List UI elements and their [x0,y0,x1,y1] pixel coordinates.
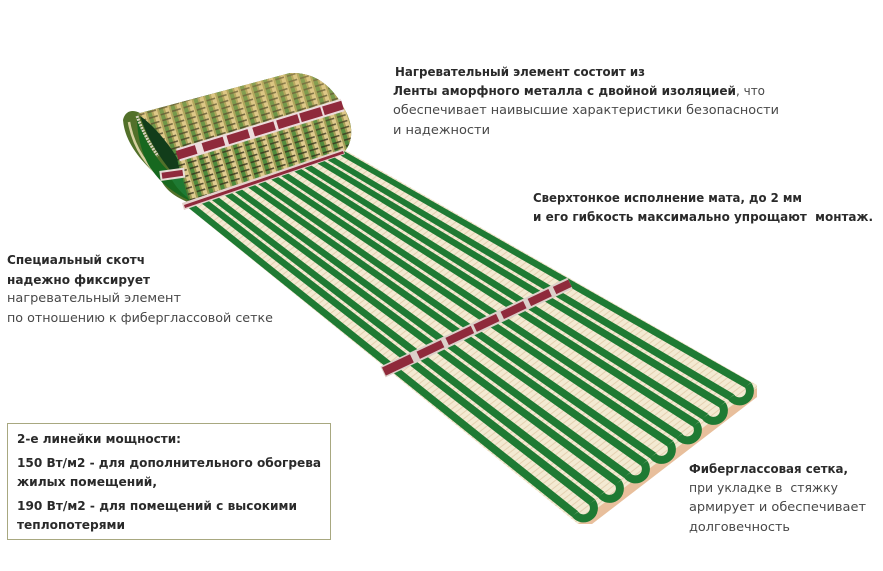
text: fiberglass mesh: Фиберглассовая сетка, [689,461,848,476]
text: special tape [7,252,273,325]
fiberglass mesh base [186,150,757,524]
callout: power lines: 2-е линейки мощности: [17,431,181,446]
callout: power lines: 190 Вт/м2 - для помещений с высокими [17,498,297,513]
text: ultra-thin mat [533,190,873,224]
text: heating element: и надежности [393,122,490,137]
text: special tape: по отношению к фиберглассовой сетке [7,310,273,325]
text: heating element: Нагревательный элемент состоит из [395,64,645,79]
callout: power lines: жилых помещений, [17,474,157,489]
heating strip loops [186,151,751,518]
text: ultra-thin mat: и его гибкость максимально упрощают монтаж. [533,209,873,224]
callout: power lines: 150 Вт/м2 - для дополнительного обогрева [17,455,321,470]
text: fiberglass mesh [689,461,866,534]
callout: power lines: теплопотерями [17,517,125,532]
text: special tape: нагревательный элемент [7,290,181,305]
text: special tape: Специальный скотч [7,252,145,267]
roll tape side piece [159,168,185,181]
text: special tape: надежно фиксирует [7,272,151,287]
middle adhesive tape [380,278,573,377]
text: heating element: , что [736,83,765,98]
roll tape lower [182,149,345,210]
text: fiberglass mesh: армирует и обеспечивает [689,499,866,514]
rolled part of the mat [123,73,351,210]
text: heating element: обеспечивает наивысшие характеристики безопасности [393,102,779,117]
text: heating element: Ленты аморфного металла с двойной изоляцией [393,83,736,98]
text: fiberglass mesh: долговечность [689,519,790,534]
text: fiberglass mesh: при укладке в стяжку [689,480,839,495]
roll tape upper [175,99,344,162]
text: ultra-thin mat: Сверхтонкое исполнение мата, до 2 мм [533,190,802,205]
callout: power lines [8,424,330,540]
text: heating element [393,64,779,137]
heating mat [123,73,757,524]
